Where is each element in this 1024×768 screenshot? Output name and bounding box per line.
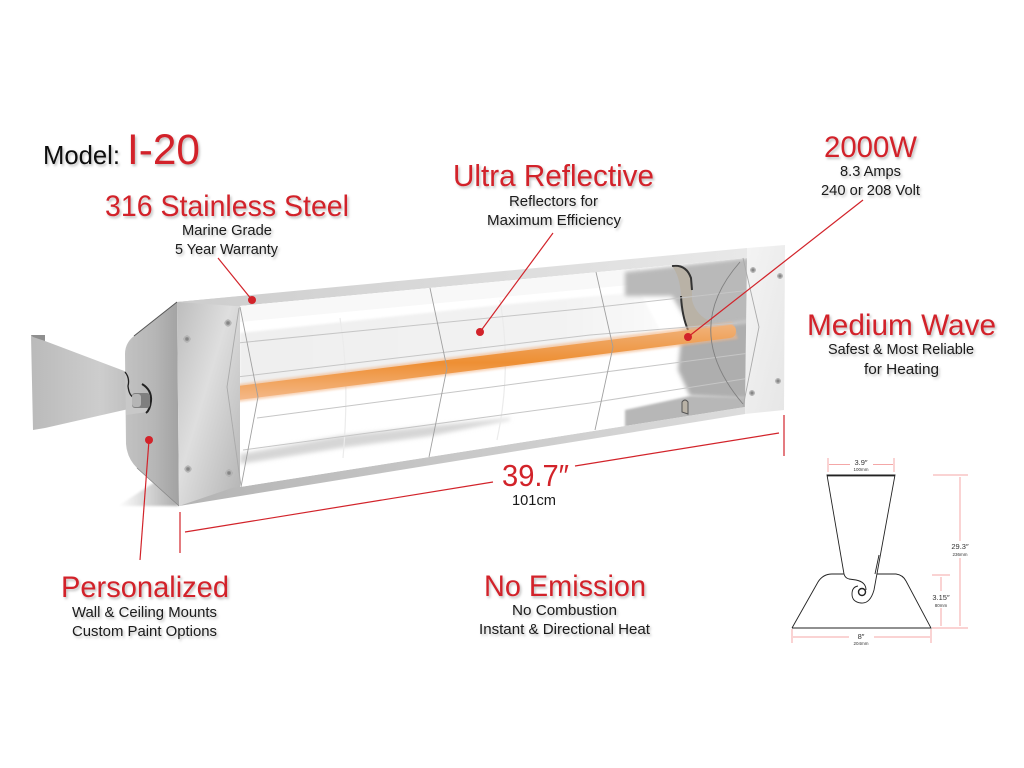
feature: 2000W: 8.3 Amps bbox=[840, 163, 901, 180]
dimension labels: 3.9″ bbox=[854, 458, 868, 467]
right end panel bbox=[745, 245, 785, 414]
feature: 316 stainless steel: 5 Year Warranty bbox=[175, 241, 278, 258]
length label bbox=[502, 458, 569, 509]
feature: ultra reflective: Ultra Reflective bbox=[453, 158, 654, 193]
pivot knob bbox=[132, 384, 151, 413]
heating tube glow bbox=[238, 322, 738, 402]
title: Model: bbox=[43, 140, 120, 170]
dimension labels: 204mm bbox=[853, 641, 869, 646]
feature: personalized: Personalized bbox=[61, 571, 229, 604]
callout: wattage bbox=[684, 200, 863, 341]
feature: 2000W bbox=[821, 131, 921, 199]
side end panel bbox=[125, 302, 179, 506]
dimension labels: 236mm bbox=[952, 552, 968, 557]
feature: 316 stainless steel bbox=[105, 190, 349, 258]
floor shadow bbox=[118, 480, 179, 506]
rear support strap bbox=[672, 266, 712, 414]
top rail bbox=[177, 248, 747, 306]
feature: ultra reflective bbox=[453, 158, 654, 229]
bracket arm in front of side panel bbox=[125, 372, 147, 415]
feature: no emission: Instant & Directional Heat bbox=[479, 621, 651, 638]
right reflector gray areas bbox=[622, 258, 747, 327]
feature: ultra reflective: Maximum Efficiency bbox=[487, 212, 621, 229]
callout: personalized bbox=[140, 436, 153, 560]
length label: 39.7″ bbox=[502, 458, 569, 493]
callout: stainless steel bbox=[218, 258, 256, 304]
feature: medium wave: for Heating bbox=[864, 361, 939, 378]
heater product illustration bbox=[31, 245, 785, 506]
bottom rail bbox=[179, 407, 745, 506]
dimension labels: 3.15″ bbox=[932, 593, 950, 602]
cross guard wires bbox=[227, 258, 759, 487]
feature: no emission bbox=[479, 570, 651, 638]
callout: reflector bbox=[476, 233, 553, 336]
feature: 316 stainless steel: Marine Grade bbox=[182, 222, 272, 239]
dimension labels: 100mm bbox=[853, 467, 869, 472]
side profile dimension diagram bbox=[792, 458, 969, 646]
wall mounting bracket bbox=[31, 335, 146, 430]
longitudinal guard wires bbox=[237, 290, 757, 450]
title: I-20 bbox=[127, 126, 200, 174]
length label: 101cm bbox=[512, 492, 556, 509]
length dimension lines bbox=[180, 415, 784, 553]
feature: personalized: Wall & Ceiling Mounts bbox=[72, 604, 217, 621]
dimension labels: 80mm bbox=[935, 603, 947, 608]
feature: 316 stainless steel: 316 Stainless Steel bbox=[105, 190, 349, 223]
callout lines and dots bbox=[140, 200, 863, 560]
feature: 2000W: 240 or 208 Volt bbox=[821, 182, 921, 199]
mounting screws bbox=[184, 267, 783, 476]
title bbox=[43, 126, 200, 174]
profile outline bbox=[792, 475, 931, 628]
dimension labels: 8″ bbox=[858, 632, 865, 641]
feature: no emission: No Combustion bbox=[512, 602, 617, 619]
dimension labels: 29.3″ bbox=[951, 542, 969, 551]
heating tube bbox=[238, 325, 736, 400]
feature: medium wave: Safest & Most Reliable bbox=[828, 341, 974, 358]
feature: ultra reflective: Reflectors for bbox=[509, 193, 598, 210]
dimension lines bbox=[792, 458, 968, 643]
front left face bbox=[177, 296, 240, 506]
feature: medium wave bbox=[807, 309, 996, 378]
reflector interior bbox=[240, 258, 747, 487]
feature: personalized: Custom Paint Options bbox=[72, 623, 217, 640]
feature: 2000W: 2000W bbox=[824, 131, 918, 164]
feature: no emission: No Emission bbox=[484, 570, 646, 603]
feature: personalized bbox=[61, 571, 229, 640]
dimension labels bbox=[853, 458, 969, 646]
feature: medium wave: Medium Wave bbox=[807, 309, 996, 342]
